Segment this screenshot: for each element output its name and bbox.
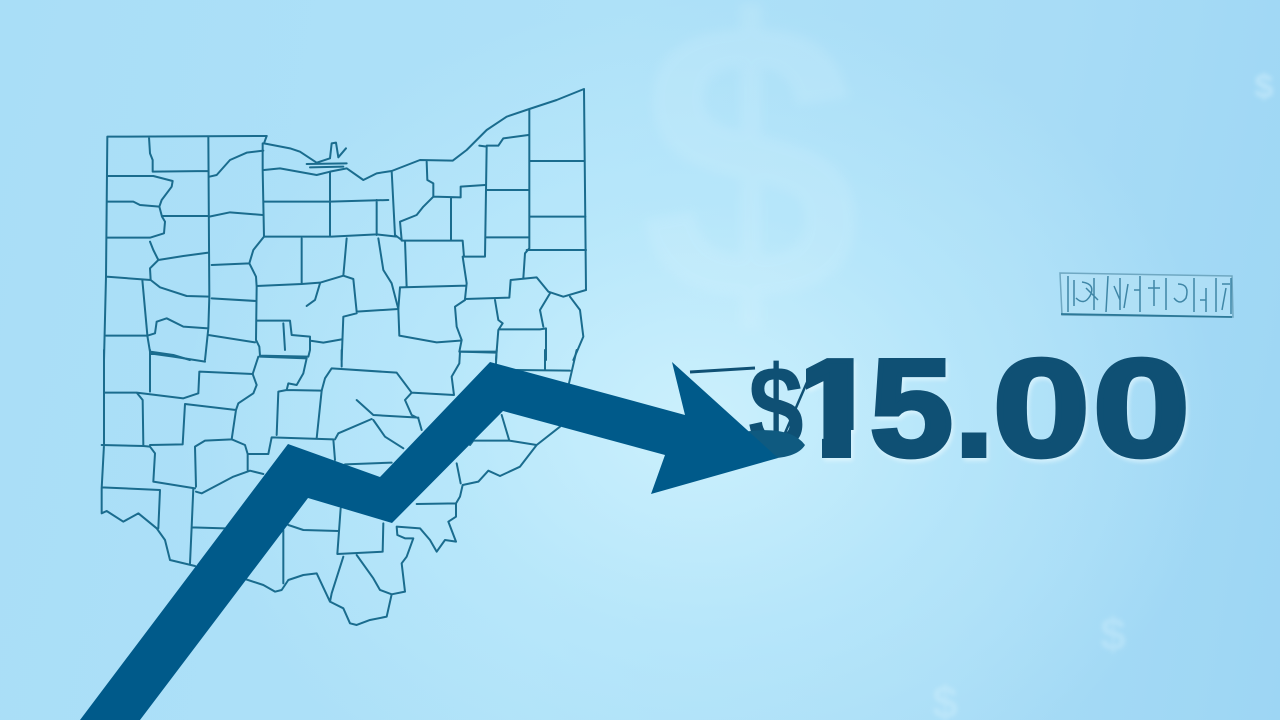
amount digits: .	[955, 332, 993, 486]
amount digits: 5	[870, 332, 953, 485]
small background dollar sign: $	[1100, 608, 1126, 660]
northern counties	[104, 89, 586, 360]
rising arrow	[80, 362, 778, 720]
distortion streaks on dollar sign	[690, 368, 808, 459]
dollar amount	[749, 356, 1190, 464]
amount digits: 00	[993, 332, 1190, 485]
Ohio county map	[102, 89, 586, 625]
faint dollar sign at top right: $	[1255, 68, 1274, 106]
dollar sign: $	[748, 342, 804, 474]
amount digits: 1	[786, 332, 883, 485]
illegible scrambled caption	[1060, 273, 1233, 317]
southern counties	[102, 350, 577, 625]
amount digits	[806, 356, 1190, 464]
